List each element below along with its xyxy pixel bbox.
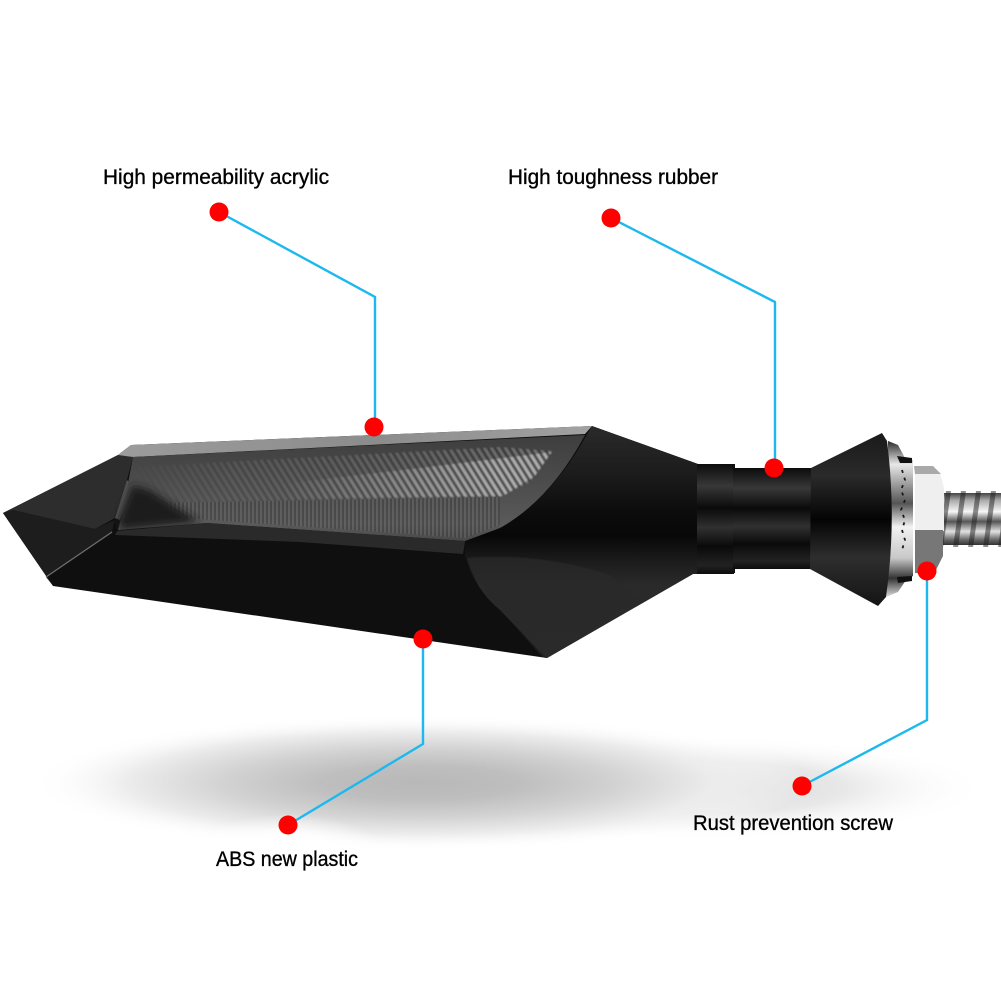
rear body shading [465,426,698,658]
leader line [288,639,423,825]
top acrylic bevel [118,426,592,457]
label: High permeability acrylic [103,166,329,189]
LED ribs bright streak [308,452,552,498]
callout: rust prevention screw [693,562,936,835]
callout: ABS new plastic [216,630,432,871]
ground shadow [30,715,990,910]
dark smudge at lens start [118,485,200,530]
rubber neck [733,468,813,569]
lower LED teeth [145,497,500,538]
marker dots [602,208,784,478]
callout: high toughness rubber [508,166,784,478]
callout: high permeability acrylic [103,166,384,436]
label: High toughness rubber [508,166,718,189]
marker dots [792,562,936,796]
LED ribs upper [192,446,552,501]
lens lower trim [115,523,465,554]
leader line [611,218,775,468]
front tip facets [3,455,133,586]
hex nut [914,466,944,574]
rear cone [810,433,892,606]
lower rear facet [468,557,593,658]
marker dots [210,202,384,436]
marker dots [278,630,432,834]
leader line [219,212,375,427]
turn signal product [3,426,1001,662]
infographic [3,168,1001,871]
main black body [3,426,735,658]
leader line [802,571,927,786]
threaded bolt [940,491,1001,547]
label: ABS new plastic [216,848,358,871]
rubber collar [697,464,734,574]
chrome washer [886,441,913,597]
label: Rust prevention screw [693,812,894,835]
acrylic lens [118,435,585,541]
